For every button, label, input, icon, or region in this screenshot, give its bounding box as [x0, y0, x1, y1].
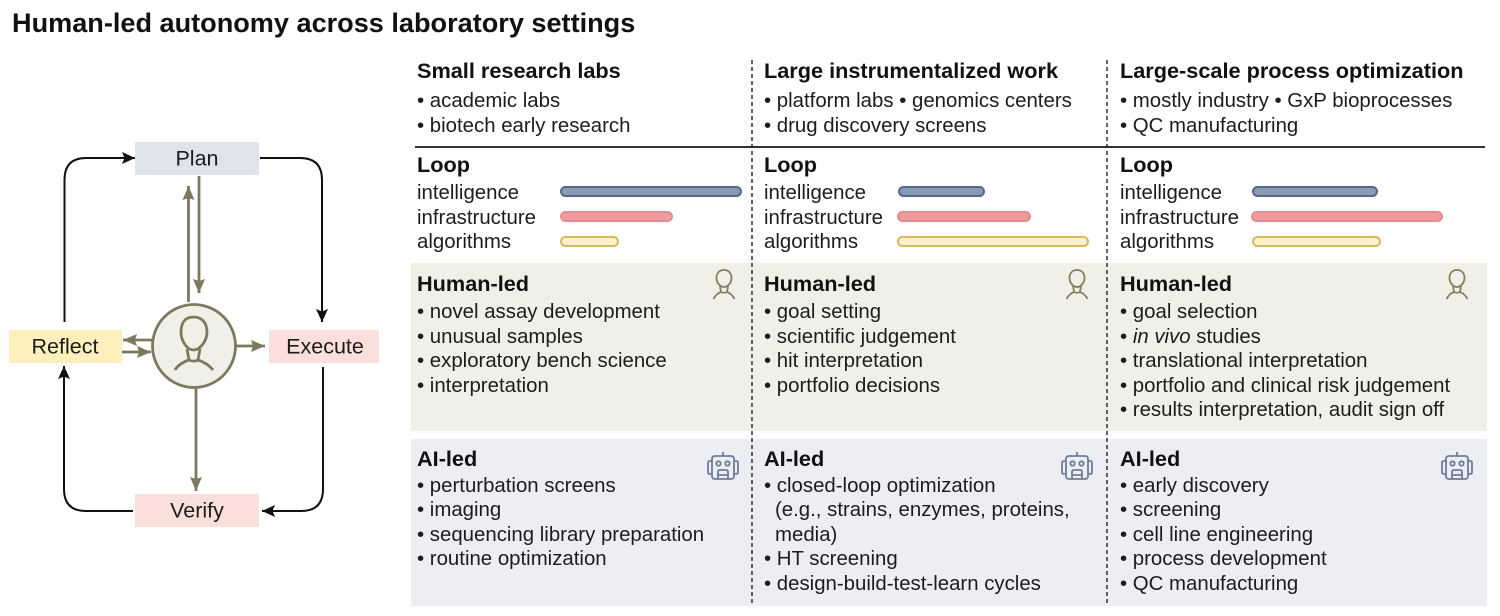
column 2 AI-led: • HT screening [764, 548, 898, 570]
icon: human in circle [152, 304, 236, 388]
column 3 header: Large-scale process optimization [1120, 58, 1463, 83]
bar: infrastructure [1251, 211, 1443, 222]
panel: AI-led background [411, 439, 1487, 606]
box: Execute [269, 330, 379, 363]
bar: algorithms [897, 236, 1089, 247]
icon: robot column 3 [1441, 452, 1473, 480]
arrow: Plan to human [198, 176, 200, 293]
icon: human column 3 [1446, 269, 1468, 300]
column 1 AI-led: • sequencing library preparation [417, 524, 704, 546]
box: Plan: Plan [175, 146, 219, 170]
column 3 human-led: • translational interpretation [1120, 350, 1367, 372]
column 1 loop: infrastructure [417, 206, 536, 228]
column 2 header: • platform labs • genomics centers [764, 90, 1072, 112]
column 2 loop: algorithms [764, 231, 858, 253]
column 3 AI-led [1120, 446, 1327, 594]
column 2 AI-led: • closed-loop optimization [764, 474, 996, 496]
arrow: human to Verify [195, 386, 197, 491]
column 1 header [417, 58, 630, 136]
column 1 AI-led [417, 446, 704, 570]
column 2 AI-led: media) [775, 524, 837, 546]
arrow: Plan to Execute [260, 158, 322, 322]
column 3 header: • mostly industry • GxP bioprocesses [1120, 90, 1452, 112]
icon: human column 1 [712, 269, 736, 300]
column 3 AI-led: AI-led [1120, 446, 1180, 471]
column 3 loop: infrastructure [1120, 206, 1239, 228]
arrow: human to Plan [187, 186, 190, 302]
cycle diagram [9, 142, 379, 527]
column 2 header: Large instrumentalized work [764, 58, 1058, 83]
icon: robot column 2 [1061, 452, 1093, 480]
arrow: Verify to Reflect [64, 366, 133, 511]
box: Plan [135, 142, 259, 175]
column 1 header: Small research labs [417, 58, 621, 83]
bar: intelligence [898, 186, 985, 197]
column 3 AI-led: • QC manufacturing [1120, 572, 1298, 594]
column 1 AI-led: • perturbation screens [417, 474, 616, 496]
column 1 AI-led: • imaging [417, 499, 501, 521]
column 3 human-led: • goal selection [1120, 301, 1258, 323]
bar: intelligence [1252, 186, 1378, 197]
column 1 AI-led: • routine optimization [417, 548, 607, 570]
arrow: Execute to Verify [262, 367, 323, 511]
column 3 AI-led: • early discovery [1120, 474, 1269, 496]
column 3 AI-led: • cell line engineering [1120, 524, 1313, 546]
column 1 AI-led: AI-led [417, 446, 477, 471]
bar: intelligence [560, 186, 742, 197]
column 2 AI-led [764, 446, 1070, 594]
column 1 human-led: • interpretation [417, 374, 549, 396]
column 2 AI-led: • design-build-test-learn cycles [764, 572, 1041, 594]
column 3 loop: algorithms [1120, 231, 1214, 253]
icon: human column 2 [1066, 269, 1088, 300]
column 2 loop: Loop [764, 152, 817, 177]
column 2 human-led: • portfolio decisions [764, 374, 940, 396]
arrow: Reflect to human [122, 351, 151, 353]
column 1 loop: algorithms [417, 231, 511, 253]
column 3 human-led: • in vivo studies [1120, 326, 1261, 348]
header divider [415, 146, 1485, 148]
column 1 human-led: • exploratory bench science [417, 350, 667, 372]
column 3 human-led: • portfolio and clinical risk judgement [1120, 374, 1450, 396]
column 1 header: • biotech early research [417, 114, 630, 136]
column 2 AI-led: (e.g., strains, enzymes, proteins, [775, 499, 1070, 521]
panel: human-led background [411, 263, 1487, 431]
column 3 human-led [1120, 271, 1450, 421]
column 3 header: • QC manufacturing [1120, 114, 1298, 136]
column 2 header [764, 58, 1072, 136]
column 3 loop: Loop [1120, 152, 1173, 177]
column 1 human-led [417, 271, 667, 396]
arrow: Reflect to Plan [64, 158, 135, 322]
box: Reflect [9, 330, 122, 363]
arrow: human to Reflect [123, 339, 152, 341]
column 2 header: • drug discovery screens [764, 114, 986, 136]
column 3 loop [1120, 152, 1443, 253]
column 3 AI-led: • process development [1120, 548, 1327, 570]
bar: algorithms [1252, 236, 1381, 247]
column 2 human-led: • scientific judgement [764, 326, 956, 348]
column 3 human-led: • results interpretation, audit sign off [1120, 399, 1444, 421]
column 2 human-led [764, 271, 956, 396]
bar: infrastructure [897, 211, 1031, 222]
box: Verify: Verify [170, 498, 224, 522]
column 3 header [1120, 58, 1463, 136]
title: Human-led autonomy across laboratory settings [12, 7, 635, 38]
arrow: human to Execute [236, 345, 265, 347]
bar: infrastructure [560, 211, 673, 222]
column 1 human-led: • unusual samples [417, 326, 583, 348]
column 2 human-led: • hit interpretation [764, 350, 923, 372]
column 2 human-led: Human-led [764, 271, 876, 296]
column 3 AI-led: • screening [1120, 499, 1221, 521]
icon: robot column 1 [707, 452, 739, 480]
column 2 loop: infrastructure [764, 206, 883, 228]
column 2 AI-led: AI-led [764, 446, 824, 471]
column 1 human-led: • novel assay development [417, 301, 660, 323]
column 2 human-led: • goal setting [764, 301, 881, 323]
box: Reflect: Reflect [32, 334, 98, 358]
column 1 header: • academic labs [417, 90, 560, 112]
column 1 loop: intelligence [417, 182, 519, 204]
column 3 loop: intelligence [1120, 182, 1222, 204]
column 1 loop [417, 152, 742, 253]
box: Execute: Execute [286, 334, 364, 358]
bar: algorithms [560, 236, 619, 247]
column 2 loop: intelligence [764, 182, 866, 204]
box: Verify [135, 494, 259, 527]
column 3 human-led: Human-led [1120, 271, 1232, 296]
column 2 loop [764, 152, 1089, 253]
column 1 human-led: Human-led [417, 271, 529, 296]
column 1 loop: Loop [417, 152, 470, 177]
